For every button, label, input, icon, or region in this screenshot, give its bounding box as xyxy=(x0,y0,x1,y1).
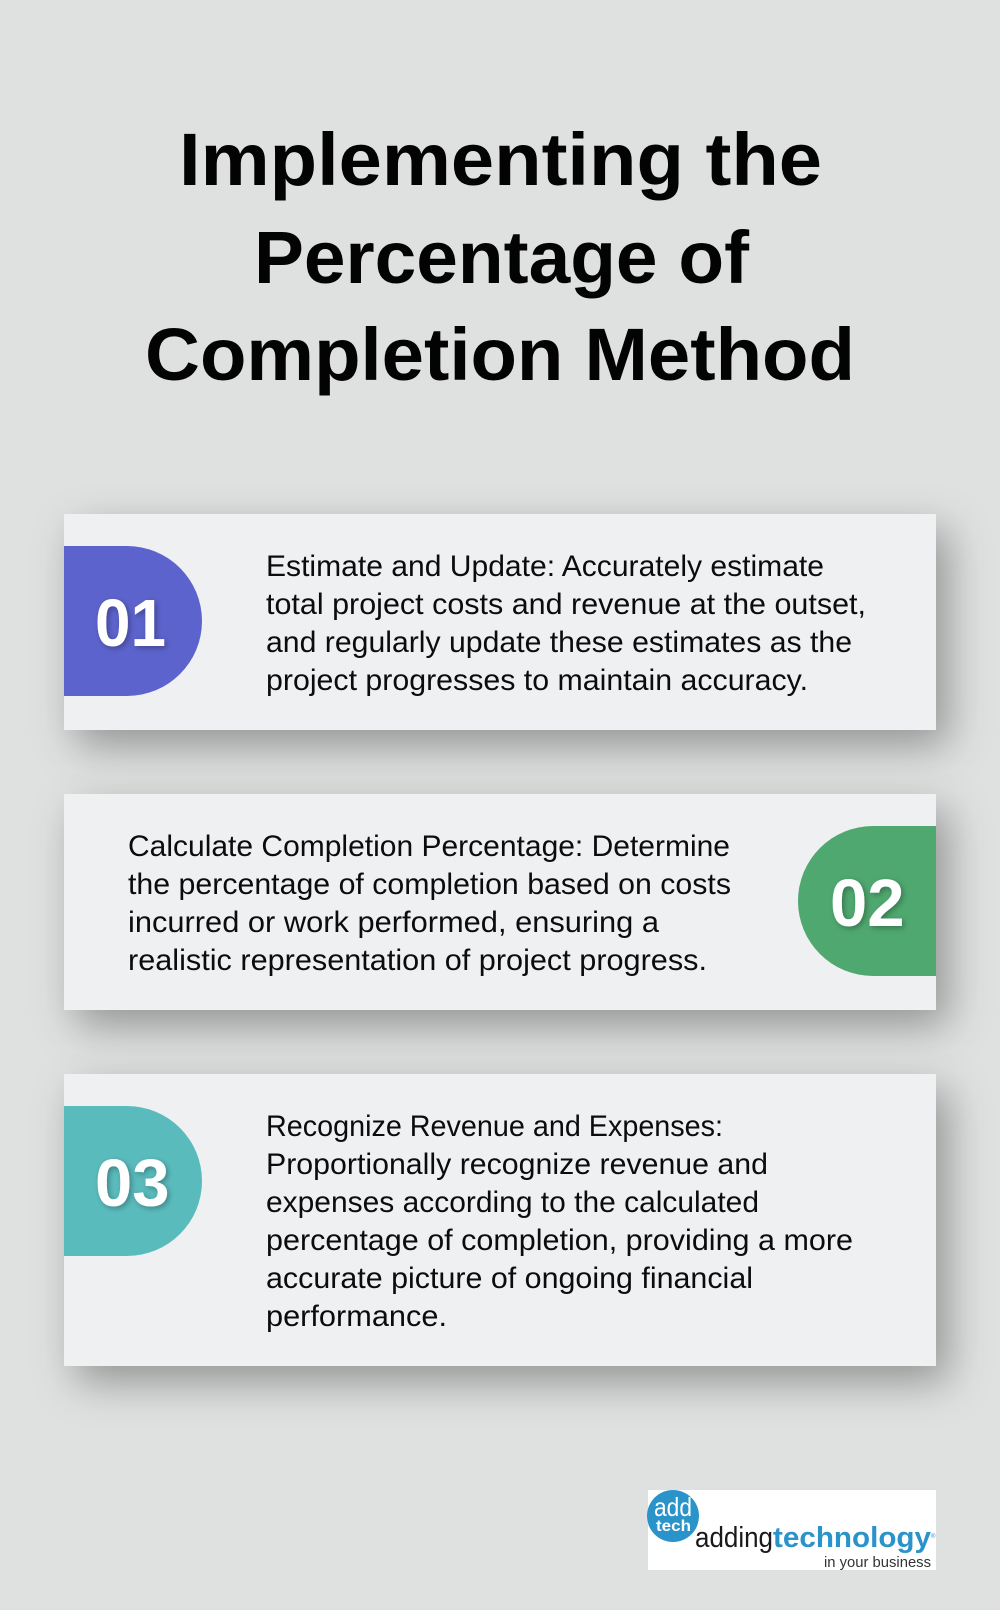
text: step 3 description: Recognize Revenue and Expenses: xyxy=(266,1110,723,1143)
title: Implementing the xyxy=(179,118,822,201)
text: step 3 description xyxy=(266,1110,853,1333)
title xyxy=(145,118,855,396)
panel: step 1 xyxy=(64,514,936,730)
text: step 1 description xyxy=(266,550,866,697)
text: step 3 description: Proportionally recognize revenue and xyxy=(266,1148,768,1181)
text: step 1 description: and regularly update these estimates as the xyxy=(266,626,852,659)
title: Percentage of xyxy=(254,216,749,299)
icon: add tech circle: add xyxy=(654,1492,692,1522)
text: step 2 description xyxy=(128,830,731,977)
badge: 03: 03 xyxy=(95,1146,170,1221)
logo wordmark: technology xyxy=(773,1522,931,1554)
icon: add tech circle: tech xyxy=(656,1518,691,1535)
logo wordmark: adding xyxy=(695,1522,773,1554)
text: step 3 description: expenses according to the calculated xyxy=(266,1186,759,1219)
badge: 03 xyxy=(64,1106,202,1256)
badge: 02: 02 xyxy=(830,866,905,941)
logo wordmark xyxy=(695,1522,936,1554)
badge: 01 xyxy=(64,546,202,696)
text: step 3 description: accurate picture of ongoing financial xyxy=(266,1262,753,1295)
text: step 2 description: realistic representation of project progress. xyxy=(128,944,707,977)
text: step 1 description: project progresses to maintain accuracy. xyxy=(266,664,808,697)
panel: step 3 xyxy=(64,1074,936,1366)
badge: 01: 01 xyxy=(95,586,166,661)
panel: step 2 xyxy=(64,794,936,1010)
title: Completion Method xyxy=(145,313,855,396)
text: step 3 description: performance. xyxy=(266,1300,447,1333)
text: step 2 description: the percentage of completion based on costs xyxy=(128,868,731,901)
text: step 1 description: total project costs and revenue at the outset, xyxy=(266,588,866,621)
text: step 2 description: Calculate Completion Percentage: Determine xyxy=(128,830,730,863)
icon: add tech circle xyxy=(647,1490,699,1542)
text: step 2 description: incurred or work performed, ensuring a xyxy=(128,906,659,939)
text: step 1 description: Estimate and Update: Accurately estimate xyxy=(266,550,824,583)
logo: adding technology xyxy=(647,1490,936,1571)
logo tagline: in your business xyxy=(824,1554,931,1571)
badge: 02 xyxy=(798,826,936,976)
text: step 3 description: percentage of completion, providing a more xyxy=(266,1224,853,1257)
logo wordmark: ® xyxy=(931,1533,936,1540)
